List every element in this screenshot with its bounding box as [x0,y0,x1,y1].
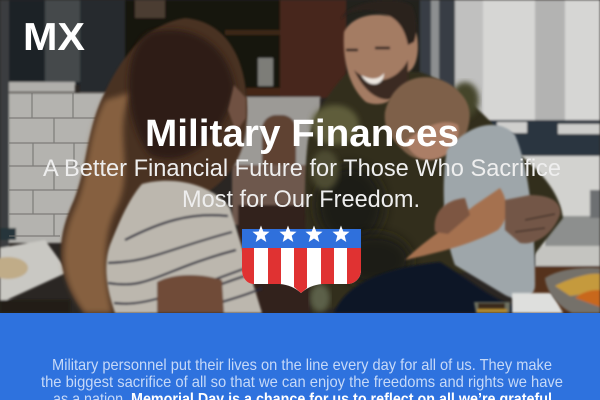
icon: stars and stripes shield [242,226,361,293]
panel: blue intro section [0,313,600,400]
subtitle [43,155,561,213]
man: camouflage jacket [305,70,563,313]
table cloth [512,293,563,313]
kitchen background [0,0,600,313]
subtitle: Most for Our Freedom. [182,186,420,213]
intro paragraph: Military personnel put their lives on the line every day for all of us. They make [52,357,552,374]
MX logo: MX [23,16,85,59]
woman: hair [61,18,247,313]
fruit bowl [545,268,600,313]
man: head [341,0,418,104]
boy: arm and man's hands [405,188,560,260]
kitchen counter [0,240,68,303]
intro paragraph [41,357,563,400]
man and boy: navy jeans [334,262,515,313]
boy: grey t-shirt [444,125,535,299]
intro paragraph: the biggest sacrifice of all so that we can enjoy the freedoms and rights we have [41,374,563,391]
hero photo: family embrace in kitchen [0,0,600,313]
subtitle: A Better Financial Future for Those Who Sacrifice [43,155,561,182]
glass on table [474,302,510,313]
boy: head and hair [385,77,470,160]
woman: face edge [228,85,246,132]
woman: striped shirt [106,181,262,313]
title: Military Finances [145,113,459,155]
wall tile grout lines [9,93,100,236]
